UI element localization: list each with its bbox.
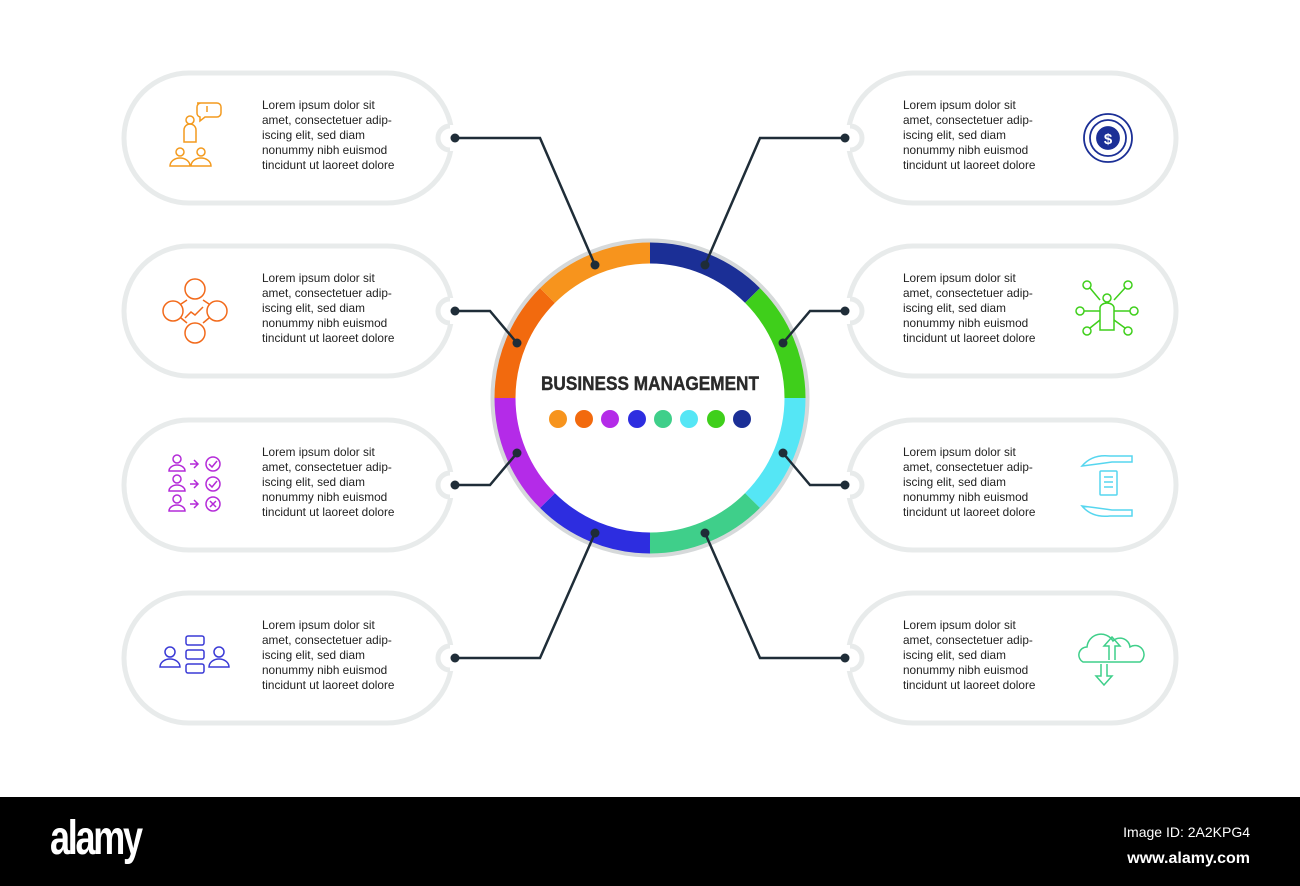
text block: iscing elit, sed diam: [262, 301, 365, 315]
text block: tincidunt ut laoreet dolore: [903, 678, 1036, 692]
text block: Lorem ipsum dolor sit: [903, 271, 1016, 285]
text block: nonummy nibh euismod: [903, 316, 1028, 330]
text block: nonummy nibh euismod: [262, 490, 387, 504]
footer bar: [0, 797, 1300, 886]
panel: left 4: [124, 593, 458, 723]
icon: people checks: [169, 455, 220, 511]
text block: tincidunt ut laoreet dolore: [262, 505, 395, 519]
connector lines: [455, 138, 845, 658]
panel: right 2: [842, 246, 1176, 376]
icon: dollar chart: $: [1104, 131, 1113, 148]
icon: leader with speech bubble: [170, 103, 221, 166]
icon: cloud transfer: [1079, 634, 1144, 685]
text block: amet, consectetuer adip-: [903, 286, 1033, 300]
text block: tincidunt ut laoreet dolore: [262, 331, 395, 345]
text block: nonummy nibh euismod: [262, 663, 387, 677]
panel: left 3: [124, 420, 458, 550]
text block: iscing elit, sed diam: [262, 648, 365, 662]
text block: amet, consectetuer adip-: [262, 460, 392, 474]
text block: amet, consectetuer adip-: [903, 113, 1033, 127]
text block: iscing elit, sed diam: [262, 475, 365, 489]
panel: right 1: [842, 73, 1176, 203]
image id text: [1123, 824, 1250, 867]
text block: amet, consectetuer adip-: [903, 633, 1033, 647]
color legend dots: [549, 410, 751, 428]
icon: network of people: [163, 279, 227, 343]
text block: nonummy nibh euismod: [903, 490, 1028, 504]
text block: iscing elit, sed diam: [903, 301, 1006, 315]
text block: iscing elit, sed diam: [903, 128, 1006, 142]
text block: tincidunt ut laoreet dolore: [262, 158, 395, 172]
text block: amet, consectetuer adip-: [903, 460, 1033, 474]
text block: iscing elit, sed diam: [903, 475, 1006, 489]
panel: right 4: [842, 593, 1176, 723]
text block: Lorem ipsum dolor sit: [262, 618, 375, 632]
text block: iscing elit, sed diam: [262, 128, 365, 142]
logo: alamy: [50, 812, 141, 865]
text block: Lorem ipsum dolor sit: [903, 618, 1016, 632]
ring: segmented circle: [493, 241, 807, 555]
icon: hands with document: [1082, 456, 1132, 516]
text block: Lorem ipsum dolor sit: [262, 271, 375, 285]
panel: right 3: [842, 420, 1176, 550]
title: BUSINESS MANAGEMENT: [541, 374, 759, 395]
text block: nonummy nibh euismod: [903, 663, 1028, 677]
connector dots: [450, 134, 850, 662]
text block: Lorem ipsum dolor sit: [262, 445, 375, 459]
text block: nonummy nibh euismod: [903, 143, 1028, 157]
image id text: Image ID: 2A2KPG4: [1123, 824, 1250, 840]
text block: Lorem ipsum dolor sit: [903, 98, 1016, 112]
image id text: www.alamy.com: [1127, 850, 1250, 867]
text block: tincidunt ut laoreet dolore: [903, 158, 1036, 172]
text block: nonummy nibh euismod: [262, 143, 387, 157]
panel: left 2: [124, 246, 458, 376]
text block: tincidunt ut laoreet dolore: [903, 505, 1036, 519]
text block: amet, consectetuer adip-: [262, 633, 392, 647]
text block: amet, consectetuer adip-: [262, 113, 392, 127]
text block: amet, consectetuer adip-: [262, 286, 392, 300]
text block: nonummy nibh euismod: [262, 316, 387, 330]
text block: tincidunt ut laoreet dolore: [903, 331, 1036, 345]
text block: Lorem ipsum dolor sit: [262, 98, 375, 112]
icon: conversation: [160, 636, 229, 673]
panel: left 1: [124, 73, 458, 203]
icon: dollar chart: [1084, 114, 1132, 162]
text block: Lorem ipsum dolor sit: [903, 445, 1016, 459]
icon: person network: [1076, 281, 1138, 335]
text block: iscing elit, sed diam: [903, 648, 1006, 662]
text block: tincidunt ut laoreet dolore: [262, 678, 395, 692]
